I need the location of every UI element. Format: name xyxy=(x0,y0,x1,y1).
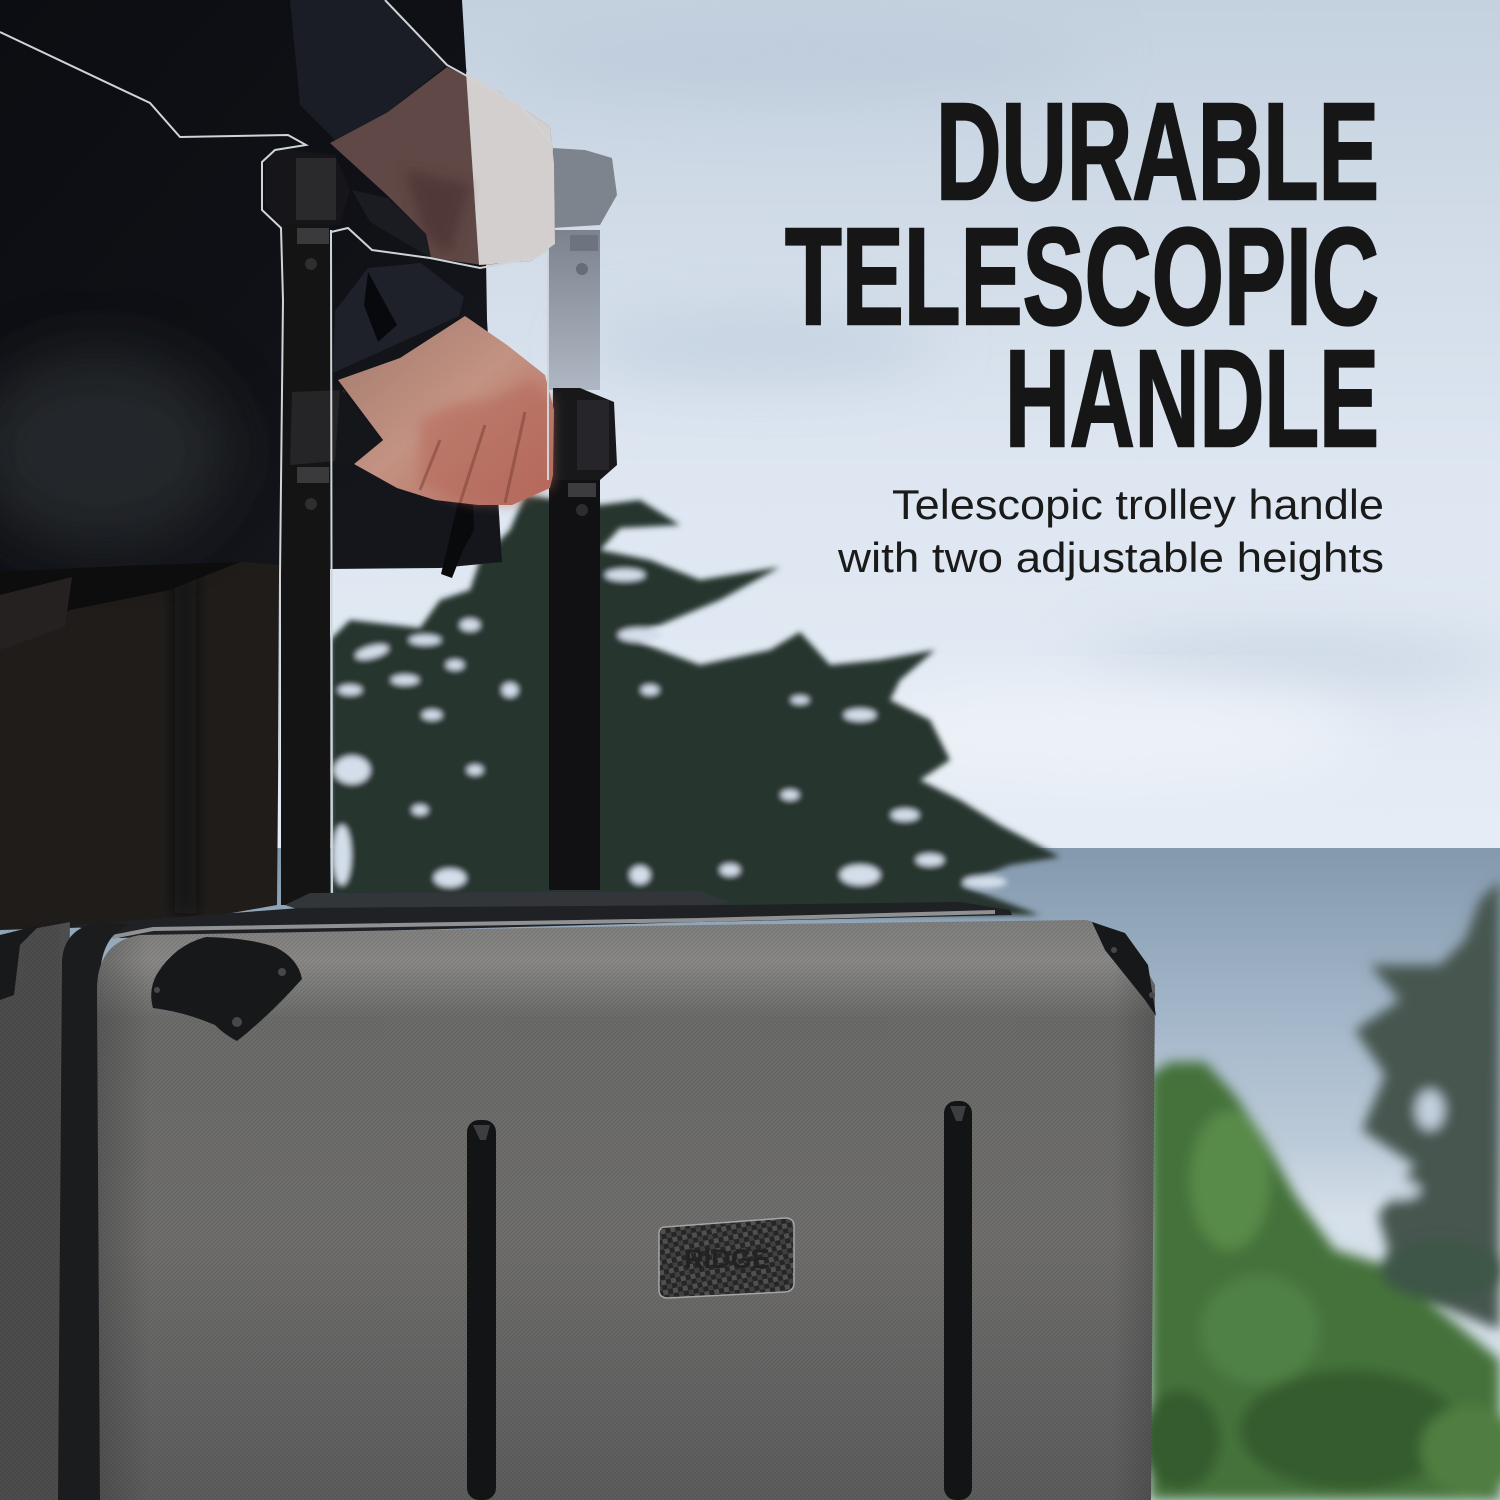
hand: gripping lower handle xyxy=(335,316,554,505)
background: sky xyxy=(0,0,1500,850)
suitcase: right corner guard xyxy=(1092,922,1156,1016)
handle: left post xyxy=(265,150,350,905)
person: jacket xyxy=(0,0,502,650)
hand: raised position (ghosted) xyxy=(330,67,555,265)
subtitle text xyxy=(837,481,1384,581)
icon: zipper pull xyxy=(441,502,474,578)
ghost outline around raised handle and arm xyxy=(0,0,553,905)
suitcase: carbon fibre logo badge xyxy=(659,1218,794,1298)
suitcase: top handle and lid xyxy=(70,891,1012,938)
background: central pine tree xyxy=(330,495,1060,915)
suitcase: seam frame xyxy=(58,922,130,1500)
suitcase: left corner guard xyxy=(151,937,302,1041)
background: distant trees on the right xyxy=(1355,880,1500,1330)
background: sea xyxy=(0,848,1500,1500)
suitcase: left vertical groove xyxy=(467,1120,496,1500)
suitcase: side panel xyxy=(0,922,70,1500)
suitcase: right vertical groove xyxy=(944,1101,972,1500)
subtitle text: with two adjustable heights xyxy=(837,534,1384,581)
title xyxy=(785,75,1379,476)
handle: right post xyxy=(549,148,617,890)
person: trousers xyxy=(0,555,280,930)
subtitle text: Telescopic trolley handle xyxy=(892,481,1384,528)
suitcase: main shell xyxy=(97,920,1155,1500)
suitcase: carbon fibre logo badge: RIDGE xyxy=(684,1244,770,1274)
background: green bush xyxy=(1140,1062,1500,1500)
